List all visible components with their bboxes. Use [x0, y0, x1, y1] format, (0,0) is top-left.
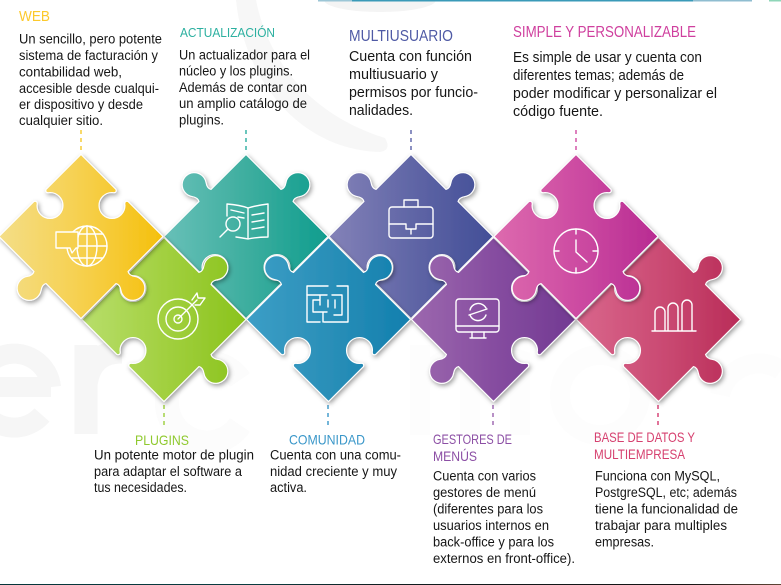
icon: globe with speech bubble — [56, 226, 107, 266]
piece: actualización (teal) — [164, 154, 328, 318]
text block: base de datos y multiempresa — [594, 429, 738, 550]
body: actualización: Además de contar con — [179, 80, 307, 95]
body: simple y personalizable: poder modificar y personalizar el — [513, 85, 717, 102]
heading: base de datos y multiempresa — [594, 429, 696, 462]
body: gestores de menús: Cuenta con varios — [433, 468, 536, 484]
piece: gestores de menús (purple) — [412, 238, 576, 402]
icon: monitor with logo — [456, 299, 499, 338]
body: simple y personalizable: Es simple de usar y cuenta con — [513, 49, 702, 66]
body: plugins: Un potente motor de plugin — [94, 448, 254, 462]
heading: base de datos y multiempresa: MULTIEMPRESA — [594, 446, 686, 462]
body: gestores de menús — [433, 468, 575, 566]
body: multiusuario: multiusuario y — [349, 66, 438, 83]
text block: gestores de menús — [433, 431, 575, 566]
heading: simple y personalizable: SIMPLE Y PERSONALIZABLE — [513, 24, 696, 41]
heading: comunidad: COMUNIDAD — [289, 432, 365, 448]
body: multiusuario — [349, 48, 478, 119]
body: actualización: un amplio catálogo de — [179, 96, 307, 111]
piece: base de datos (crimson) — [576, 238, 740, 402]
body: gestores de menús: gestores de menú — [433, 485, 536, 500]
piece: comunidad (blue) — [246, 238, 410, 402]
body: web — [19, 32, 162, 128]
heading: gestores de menús — [433, 431, 512, 464]
piece: simple y personalizable (magenta) — [494, 154, 658, 318]
body: base de datos y multiempresa: PostgreSQL, etc; además — [595, 485, 737, 500]
body: comunidad: Cuenta con una comu- — [270, 448, 401, 462]
body: gestores de menús: usuarios internos en — [433, 518, 549, 533]
body: multiusuario: nalidades. — [349, 102, 413, 119]
body: actualización: plugins. — [179, 112, 224, 128]
body: simple y personalizable: diferentes temas; además de — [513, 67, 684, 84]
text block: multiusuario — [349, 28, 478, 119]
body: simple y personalizable: código fuente. — [513, 103, 603, 120]
body: web: er dispositivo y desde — [19, 97, 143, 112]
body: base de datos y multiempresa: Funciona con MySQL, — [595, 468, 720, 484]
icon: target with arrow — [158, 293, 205, 339]
icon: bar chart arches — [652, 300, 696, 331]
piece: multiusuario (indigo) — [329, 154, 493, 318]
body: gestores de menús: externos en front-office). — [433, 551, 575, 566]
heading: gestores de menús: MENÚS — [433, 448, 477, 464]
body: comunidad — [270, 448, 401, 495]
dashed connectors — [81, 130, 658, 425]
body: base de datos y multiempresa: tiene la funcionalidad de — [595, 502, 738, 516]
heading: web: WEB — [19, 8, 50, 25]
icon: briefcase — [389, 200, 433, 238]
body: plugins: tus necesidades. — [94, 480, 187, 495]
icon: book with magnifier — [220, 204, 268, 239]
icon: maze — [307, 286, 348, 322]
body: multiusuario: permisos por funcio- — [349, 84, 478, 101]
piece: plugins (green) — [82, 238, 246, 402]
body: gestores de menús: (diferentes para los — [433, 502, 543, 516]
heading: base de datos y multiempresa: BASE DE DATOS Y — [594, 429, 696, 445]
body: base de datos y multiempresa: trabajar para multiples — [595, 518, 727, 533]
piece: web (yellow) — [0, 154, 163, 318]
heading: actualización: ACTUALIZACIÓN — [180, 25, 275, 40]
body: base de datos y multiempresa: empresas. — [595, 534, 654, 550]
body: multiusuario: Cuenta con función — [349, 48, 472, 65]
heading: multiusuario: MULTIUSUARIO — [349, 28, 453, 45]
text block: actualización — [179, 25, 310, 128]
puzzle: eight interlocking pieces — [0, 154, 740, 402]
body: actualización — [179, 48, 310, 128]
heading: plugins: PLUGINS — [135, 432, 189, 448]
body: web: cualquier sitio. — [19, 113, 103, 128]
body: web: Un sencillo, pero potente — [19, 32, 162, 46]
body: web: accesible desde cualqui- — [19, 81, 159, 96]
body: plugins — [94, 448, 254, 495]
body: web: sistema de facturación y — [19, 48, 158, 63]
body: plugins: para adaptar el software a — [94, 464, 242, 479]
text block: web — [19, 8, 162, 128]
body: simple y personalizable — [513, 49, 717, 120]
text block: comunidad — [270, 432, 401, 495]
icon: clock — [554, 229, 598, 273]
text block: plugins — [94, 432, 254, 495]
body: actualización: Un actualizador para el — [179, 48, 310, 62]
body: web: contabilidad web, — [19, 64, 122, 80]
body: comunidad: activa. — [270, 480, 307, 495]
heading: gestores de menús: GESTORES DE — [433, 431, 512, 447]
body: actualización: núcleo y los plugins. — [179, 64, 293, 78]
text block: simple y personalizable — [513, 24, 717, 120]
body: comunidad: nidad creciente y muy — [270, 464, 397, 479]
body: gestores de menús: back-office y para los — [433, 534, 554, 550]
body: base de datos y multiempresa — [595, 468, 738, 550]
